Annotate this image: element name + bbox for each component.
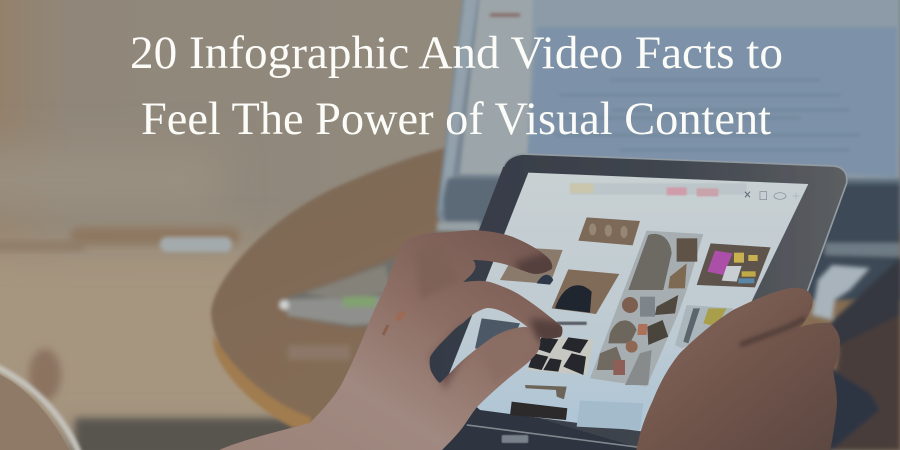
round wooden table (211, 148, 900, 450)
silver upper and right rim (503, 154, 847, 293)
dark hat detail under index finger (537, 275, 553, 285)
blurred white cable at lower left (0, 366, 80, 450)
thumbnail: colourful stationery (697, 243, 771, 287)
tablet lower side (420, 373, 667, 450)
tablet (420, 154, 847, 450)
laptop screen text lines (490, 15, 860, 150)
tablet frame (420, 154, 847, 450)
tablet home button area (502, 435, 528, 443)
thumbnail: under index finger (500, 247, 563, 284)
left hand tapping the tablet (220, 230, 562, 450)
small left preview card (475, 318, 520, 353)
title line 2: Feel The Power of Visual Content (141, 93, 771, 145)
thumbnail: hat on brown (552, 269, 619, 314)
clothing collage column (590, 231, 703, 387)
thumbnail: dark product trio (578, 217, 640, 245)
tablet screen (447, 173, 808, 432)
thumbnail: fashion and yellow items (675, 305, 733, 348)
phone or notebook on table (279, 232, 470, 327)
thumbnail: black diamond pattern (527, 336, 594, 375)
silver bottom edge (467, 425, 647, 448)
title line 1: 20 Infographic And Video Facts to (130, 27, 783, 79)
laptop base and dark keyboard (437, 178, 900, 300)
thumbnail: pale blue image (577, 401, 643, 430)
papers and dark items at right of tablet (812, 258, 900, 450)
thumbnail: dark image at bottom (510, 402, 567, 420)
heading strip in tablet layout (557, 322, 587, 325)
right hand holding the tablet (630, 280, 845, 450)
thumbnail: hammer object (525, 385, 567, 399)
title (130, 27, 783, 145)
app toolbar with pink tab (570, 183, 799, 200)
laptop in background (437, 0, 900, 232)
